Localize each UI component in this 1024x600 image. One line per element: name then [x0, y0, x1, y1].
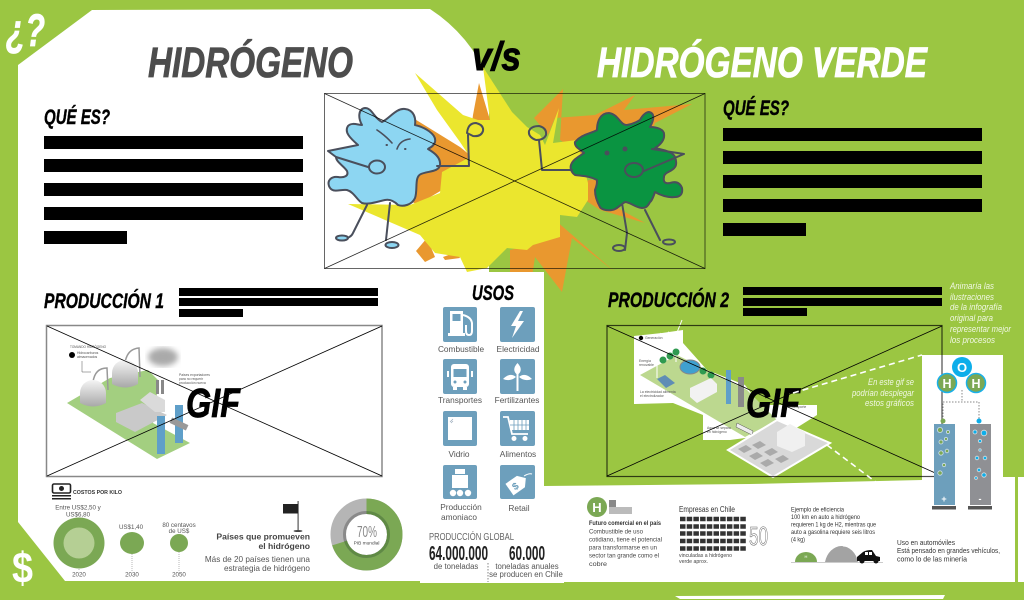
illustration: green hydrogen plant: en hidrógeno: [707, 430, 727, 434]
icon: H: [587, 497, 607, 517]
note: animaria: original para: [950, 313, 993, 324]
title: hidrogeno: HIDRÓGENO: [148, 39, 353, 87]
paises text: [205, 555, 310, 573]
character: green hydrogen: [529, 112, 684, 251]
cost 2050: de US$: [169, 528, 190, 535]
futuro text: para transformarse en un: [589, 544, 657, 552]
note: animaria: los procesos: [950, 335, 995, 346]
usos tile: vidrio: [443, 411, 477, 446]
illustration: green hydrogen plant: Generación: [645, 336, 663, 340]
usos labels: Combustible: [438, 344, 484, 354]
icon: element badge: [609, 500, 616, 507]
cost 2030: US$1,40: [119, 524, 144, 531]
electrolysis columns: [932, 418, 992, 510]
heading: produccion 1: PRODUCCIÓN 1: [44, 289, 164, 313]
usos tile: alimentos: [500, 411, 535, 446]
produccion global heading: PRODUCCIÓN GLOBAL: [429, 530, 514, 543]
note: animaria: Animaría las: [949, 281, 994, 292]
costos por kilo: [52, 484, 196, 578]
usos tile: retail: $: [510, 481, 522, 493]
heading: produccion 2: PRODUCCIÓN 2: [608, 288, 729, 312]
water molecule: H: [942, 377, 952, 391]
illustration: green hydrogen plant: [634, 320, 830, 477]
note: animaria: ilustraciones: [950, 292, 994, 303]
main building: [777, 424, 805, 452]
eficiencia text: [791, 506, 876, 544]
heading: que es right: QUÉ ES?: [723, 97, 789, 120]
pipes: [93, 348, 140, 390]
futuro text: Combustible de uso: [589, 528, 643, 536]
usos labels: Fertilizantes: [495, 395, 539, 405]
dotted divider: [487, 563, 489, 582]
illustration: hydrogen plant: almacenados: [77, 355, 97, 359]
blue legs: [338, 203, 390, 240]
gif label 2: GIF: [746, 380, 801, 426]
eficiencia block: CO2: [843, 543, 852, 548]
solar panels: [657, 375, 675, 388]
green eyes: [604, 150, 610, 156]
houses: [738, 441, 789, 467]
donut chart: 70%: [357, 524, 377, 541]
note: animaria: representar mejor: [950, 324, 1012, 335]
blue feet: [336, 236, 348, 240]
usos labels: Electricidad: [497, 344, 540, 354]
eficiencia text: requieren 1 kg de H2, mientras que: [791, 522, 876, 528]
produccion global figure 2: 60.000: [509, 543, 545, 565]
explosion orange: [395, 83, 692, 292]
water molecule: [938, 357, 986, 420]
windmills: [650, 320, 682, 378]
panel: usos: [420, 272, 544, 583]
redacted text produccion 1: [179, 288, 378, 317]
produccion global captions: toneladas anuales: [495, 562, 559, 571]
empresas block: [679, 505, 768, 565]
heading: que es left: QUÉ ES?: [44, 106, 110, 129]
atom H left: [938, 374, 956, 392]
tiny captions: TOMANDO HIDRÓGENO: [70, 344, 106, 349]
usos labels: [438, 344, 540, 522]
blue arm: [336, 135, 469, 167]
eficiencia text: 100 km en auto a hidrógeno: [791, 514, 860, 521]
H2 dome: [795, 552, 817, 562]
illustration: green hydrogen plant: Energía: [639, 359, 651, 363]
costos heading: COSTOS POR KILO: [73, 490, 122, 496]
green legs: [622, 203, 660, 250]
icon: question marks: ¿?: [6, 5, 45, 56]
illustration: hydrogen plant: Hidrocarburos: [77, 351, 99, 355]
redacted text produccion 2: [743, 287, 942, 316]
empresas block: verde aprox.: [679, 559, 708, 565]
usos tile: amoniaco: [443, 465, 477, 499]
usos tile: fertilizantes: [500, 359, 535, 394]
usos tile: electricidad: [500, 307, 535, 342]
usos tile: transportes: [443, 359, 477, 394]
note: animaria: de la infografía: [950, 302, 1002, 313]
cost 2020: [54, 504, 104, 578]
dome 2: [112, 360, 138, 388]
green feet: [613, 245, 625, 251]
usos tile: combustible: [443, 307, 477, 342]
illustration: green hydrogen plant: Agua se separa: [707, 426, 731, 430]
produccion global captions: de toneladas: [434, 562, 478, 571]
column plus: [934, 424, 955, 505]
donut chart: PIB mundial: [354, 540, 379, 546]
illustration: green hydrogen plant: el electrolizador: [640, 394, 665, 398]
ground strip: [640, 355, 777, 437]
eficiencia block: [791, 506, 883, 564]
usos labels: Producción: [440, 502, 482, 512]
paises heading: el hidrógeno: [258, 541, 310, 551]
eficiencia text: (4 kg): [791, 536, 805, 544]
heading: usos: USOS: [472, 282, 514, 305]
plant ground: [67, 370, 190, 459]
automoviles block: [897, 538, 1000, 564]
blue body: [328, 108, 440, 206]
cost 2030: [119, 524, 144, 578]
dome 1: [80, 380, 106, 406]
automoviles block: Uso en automóviles: [897, 538, 955, 547]
usos labels: amoniaco: [441, 512, 477, 522]
brush stroke bottom: [675, 595, 945, 599]
gif placeholder 1: [46, 326, 382, 476]
water molecule: H: [971, 377, 981, 391]
blue fists: [369, 160, 385, 174]
cost 2050: 2050: [172, 572, 186, 578]
eficiencia text: auto a gasolina requiere seis litros: [791, 529, 875, 536]
electrolysis columns: -: [978, 494, 982, 504]
green fists: [529, 126, 546, 140]
title: versus: v/s: [472, 35, 521, 79]
paper patch: [634, 330, 817, 440]
icon: dollar: $: [12, 544, 33, 593]
futuro text: cobre: [589, 561, 607, 568]
illustration: green hydrogen plant: La electricidad alimenta: [640, 390, 676, 394]
futuro text: [589, 528, 662, 568]
icon: money: [52, 484, 71, 500]
illustration: hydrogen plant: Paises exportadores: [179, 373, 210, 377]
truck: [170, 417, 188, 431]
illustration: hydrogen plant: para no requerir: [179, 377, 204, 381]
atom O: [952, 357, 972, 377]
explosion illustration: [328, 67, 692, 292]
electrolyser building: [690, 378, 717, 403]
illustration: hydrogen plant: [67, 344, 210, 459]
tiny captions: [639, 336, 643, 340]
usos labels: Transportes: [438, 395, 482, 405]
blue brows: [377, 130, 410, 149]
columns: [726, 370, 731, 404]
paises heading: [216, 532, 310, 551]
image placeholder: characters: [324, 94, 705, 268]
empresas caption: vinculadas a hidrógeno: [679, 553, 732, 559]
bubbles blue: [973, 430, 987, 479]
gif placeholder 2: [607, 326, 942, 476]
factory building: [116, 403, 167, 432]
trees: [660, 348, 714, 378]
number 50: 50: [749, 521, 768, 551]
futuro text: sector tan grande como el: [589, 552, 659, 560]
atom H right: [966, 374, 986, 392]
futuro text: cotidiano, tiene el potencial: [589, 536, 662, 544]
donut chart: [337, 505, 396, 564]
blue eyes: [386, 145, 406, 149]
explosion yellow: [348, 67, 588, 272]
green arm: [539, 140, 684, 171]
base line: [791, 562, 883, 564]
title: hidrogeno verde: HIDRÓGENO VERDE: [597, 39, 928, 87]
cost 2050: [162, 522, 196, 578]
paises text: estrategia de hidrógeno: [224, 564, 310, 573]
paises text: Más de 20 países tienen una: [205, 555, 310, 564]
blue columns: [157, 416, 165, 454]
redacted text left: [44, 136, 303, 244]
dashed connectors: [793, 355, 922, 483]
electrolysis columns: +: [941, 494, 947, 504]
produccion global figure 1: 64.000.000: [429, 543, 488, 565]
gif label 1: GIF: [186, 380, 241, 426]
eficiencia text: Ejemplo de eficiencia: [791, 506, 844, 514]
note: en este gif: En este gif se: [868, 377, 914, 388]
redacted text right: [723, 128, 982, 236]
futuro heading: Futuro comercial en el país: [589, 520, 661, 527]
dotted links: [943, 390, 979, 420]
futuro comercial block: [587, 497, 662, 568]
smoke: [148, 348, 178, 366]
usos labels: Alimentos: [500, 449, 536, 459]
green strip right: [1015, 477, 1018, 582]
cost 2020: Entre US$2,50 y: [55, 504, 102, 512]
CO2 dome: [825, 546, 858, 562]
cost 2050: 80 centavos: [162, 522, 196, 529]
usos tile: retail: [500, 465, 535, 499]
automoviles block: Está pensado en grandes vehículos,: [897, 546, 1000, 555]
illustration: green hydrogen plant: renovable: [639, 363, 654, 367]
futuro comercial block: H: [592, 500, 602, 515]
water pond: [680, 360, 700, 374]
water molecule: O: [957, 360, 967, 375]
bus: [736, 423, 753, 435]
empresas heading: Empresas en Chile: [679, 505, 735, 514]
cost 2020: US$6,80: [66, 512, 91, 518]
icon: flag: [283, 501, 302, 532]
usos labels: Vidrio: [448, 449, 470, 459]
column minus: [970, 424, 991, 505]
icon: car: [857, 550, 880, 564]
note: en este gif: podrían desplegar: [851, 388, 915, 399]
note: en este gif: estos gráficos: [865, 398, 914, 409]
icon grid: [680, 519, 747, 548]
green body: [571, 112, 682, 210]
character: blue hydrogen: [328, 108, 483, 248]
note: animaria: [949, 281, 1012, 346]
storage yard: [728, 420, 830, 477]
cost 2020: 2020: [72, 572, 86, 578]
bubbles green: [937, 427, 950, 475]
stacks: [156, 380, 159, 394]
paises heading: Países que promueven: [216, 532, 310, 542]
produccion global captions: [434, 562, 563, 579]
produccion global captions: se producen en Chile: [489, 570, 563, 579]
illustration: green hydrogen plant: Transporte: [790, 405, 806, 409]
eficiencia block: H: [805, 554, 808, 559]
automoviles block: como lo de las minería: [897, 554, 968, 564]
illustration: hydrogen plant: producción nueva: [179, 381, 206, 385]
note: en este gif: [851, 377, 915, 409]
usos labels: Retail: [508, 503, 530, 513]
cost 2030: 2030: [125, 572, 139, 578]
